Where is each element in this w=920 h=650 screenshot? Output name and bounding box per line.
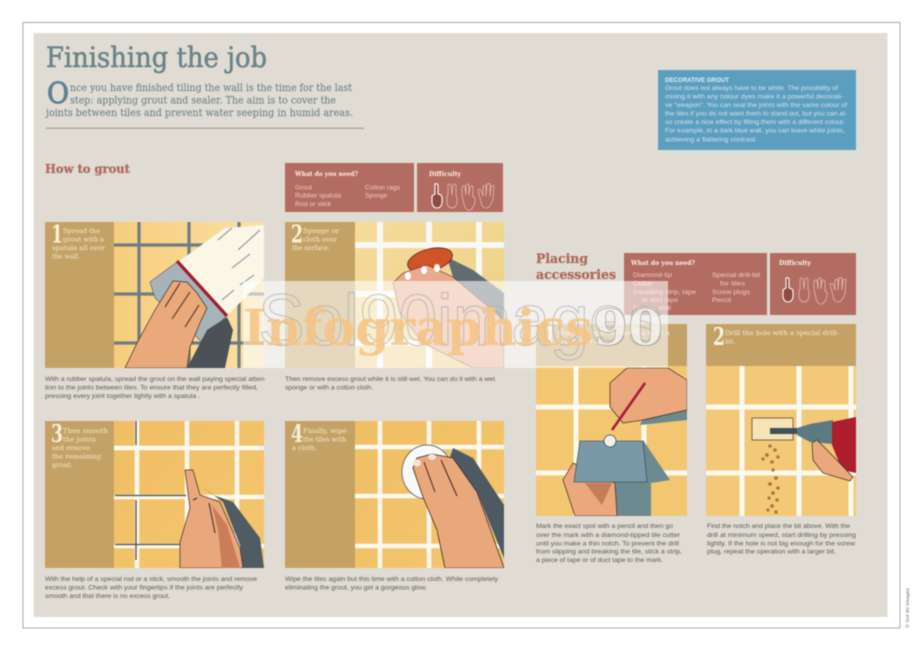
step 3: text column: 3: [51, 419, 63, 448]
panel: difficulty (grout): Difficulty: [429, 171, 462, 178]
step 3: text column: the remaining: [52, 454, 101, 460]
heading: how to grout: How to grout: [45, 162, 130, 176]
step 2: text column: [285, 220, 355, 368]
step 1: text column: grout with a: [63, 236, 104, 244]
decorative grout callout: the tiles if you do not want them to stand out, but you can al-: [665, 111, 847, 118]
icon: three fingers: [814, 278, 827, 304]
step 4: text column: 4: [291, 419, 303, 448]
decorative grout callout: achieving a flattering contrast.: [665, 136, 757, 143]
accessory step 2 caption: plug, repeat the operation with a larger bit.: [707, 549, 836, 556]
panel: what do you need (accessories): What do you need?: [630, 260, 695, 267]
accessory step 1 caption: a piece of tape or of duct tape to the mark.: [536, 557, 663, 564]
accessory step 1 caption: [536, 523, 682, 564]
panel: what do you need (accessories): Screw plugs: [712, 289, 750, 296]
step 3: text column: [45, 419, 114, 568]
heading: placing accessories: accessories: [536, 268, 616, 283]
panel: what do you need (grout): Sponge: [365, 192, 388, 200]
decorative grout callout: [658, 70, 856, 150]
panel: difficulty (accessories): Difficulty: [779, 260, 812, 267]
step 3 caption: [45, 576, 258, 600]
step 1 caption: tion to the joints between tiles. To ensure that they are perfectly filled,: [45, 384, 258, 392]
step 3: text column: grout.: [52, 462, 73, 469]
icon: two fingers: [799, 278, 809, 302]
step 1: text column: 1: [51, 220, 63, 248]
step 1: text column: the wall.: [52, 254, 80, 260]
step 4: text column: a cloth.: [292, 445, 317, 452]
accessory step 1: header: 1: [544, 321, 556, 350]
step 1: text column: Spread the: [63, 228, 100, 235]
step 4: text column: [285, 419, 355, 568]
step 3 caption: excess grout. Check with your fingertips if the joints are perfectly: [45, 585, 244, 592]
accessory step 1: header: Mark the spot on the tile with a: [557, 330, 670, 337]
step 2: text column: 2: [291, 220, 303, 248]
decorative grout callout: so create a nice effect by filling them with a different colour.: [665, 119, 845, 126]
icon: four fingers: [830, 278, 846, 302]
panel: what do you need (accessories): Special drill-bit: [712, 272, 760, 279]
decorative grout callout: For example, in a dark blue wall, you can leave white joints,: [665, 128, 845, 135]
icon: one finger difficulty: [783, 278, 793, 302]
accessory step 1 caption: Mark the exact spot with a pencil and then go: [536, 523, 674, 530]
step 4: text column: Finally, wipe: [303, 428, 348, 435]
accessory step 2 caption: lightly. If the hole is not big enough for the screw: [707, 540, 856, 548]
step 1: text column: spatula all over: [52, 245, 105, 252]
step 1 caption: With a rubber spatula, spread the grout on the wall paying special atten-: [45, 376, 266, 383]
step 4: text column: the tiles with: [303, 436, 346, 444]
watermark: Infographics: [243, 298, 593, 357]
step 2 caption: Then remove excess grout while it is still wet. You can do it with a wet: [285, 376, 495, 383]
step 4 caption: eliminating the grout, you get a gorgeous glow.: [285, 584, 427, 592]
step 3: text column: Then smooth: [63, 428, 108, 435]
step 3: text column: the joints: [63, 436, 96, 444]
step 3: illustration smoothing joints: [113, 420, 265, 569]
watermark: Sol90images: [258, 281, 663, 361]
accessory step 1 caption: from slipping and breaking the tile, stick a strip,: [536, 549, 682, 556]
step 2 caption: [285, 376, 495, 392]
step 3 caption: With the help of a special rod or a stick, smooth the joints and remove: [45, 576, 258, 583]
panel: what do you need (grout): [285, 163, 414, 212]
accessory step 1 caption: over the mark with a diamond-tipped tile cutter: [536, 532, 680, 539]
icon: three fingers: [462, 184, 475, 210]
step 2 caption: sponge or with a cotton cloth.: [285, 384, 373, 392]
step 1: text column: [45, 220, 114, 368]
panel: what do you need (accessories): Pencil: [712, 297, 731, 304]
heading: placing accessories: [536, 252, 616, 283]
step 4: illustration wiping tiles: [354, 420, 505, 569]
step 1 caption: [45, 376, 266, 400]
panel: what do you need (grout): Cotton rags: [365, 184, 400, 192]
decorative grout callout: ve "weapon". You can seal the joints with the same colour of: [665, 102, 847, 109]
step 1: illustration spatula and hand: [113, 221, 264, 369]
step 4 caption: Wipe the tiles again but this time with a cotton cloth. While completely: [285, 576, 499, 583]
panel: what do you need (grout): Rubber spatula: [295, 192, 342, 200]
side credit: © Sol 90 Images: [904, 587, 910, 628]
accessory step 2 caption: [707, 523, 857, 556]
icon: one finger difficulty: [432, 184, 442, 208]
decorative grout callout: Grout does not always have to be white. The possibility of: [665, 85, 838, 92]
intro paragraph: O: [47, 76, 69, 110]
icon: two fingers: [447, 184, 457, 208]
title: Finishing the job: [46, 41, 267, 74]
panel: difficulty (accessories): [770, 253, 856, 315]
panel: what do you need (accessories): Plastic drill: [633, 305, 671, 312]
accessory step 1: illustration marking tile: [536, 366, 688, 517]
panel: what do you need (grout): What do you need?: [294, 171, 358, 178]
accessory step 1: header: cutter.: [557, 338, 597, 345]
panel: what do you need (accessories): or duct tape: [642, 297, 679, 304]
panel: what do you need (accessories): for tiles: [720, 280, 745, 288]
accessory step 1: header: [536, 321, 687, 366]
panel: what do you need (accessories): Diamond-tip: [633, 272, 673, 279]
panel: what do you need (grout): Grout: [295, 184, 312, 192]
step 2: text column: cloth over: [303, 236, 337, 244]
step 2: text column: the surface.: [292, 245, 330, 252]
panel: what do you need (accessories): [624, 253, 767, 315]
intro paragraph: [45, 76, 353, 119]
intro paragraph: step: applying grout and sealer. The aim is to cover the: [70, 96, 336, 106]
step 4 caption: [285, 576, 499, 592]
panel: what do you need (grout): Rod or stick: [295, 201, 332, 208]
icon: four fingers: [478, 184, 494, 208]
accessory step 2: header: bit.: [725, 338, 735, 346]
step 2: text column: Sponge or: [303, 228, 339, 235]
heading: placing accessories: Placing: [536, 252, 588, 267]
accessory step 2: illustration drill: [706, 366, 857, 516]
intro paragraph: joints between tiles and prevent water seeping in humid areas.: [45, 108, 353, 119]
watermark: 90: [593, 298, 663, 357]
decorative grout callout: DECORATIVE GROUT: [665, 77, 729, 84]
panel: what do you need (accessories): Cutter: [633, 280, 653, 288]
decorative grout callout: mixing it with any colour dyes make it a powerful decorati-: [665, 94, 843, 100]
accessory step 1 caption: until you make a thin notch. To prevent the drill: [536, 540, 679, 548]
accessory step 2: header: [706, 322, 856, 366]
intro paragraph: nce you have finished tiling the wall is the time for the last: [70, 83, 352, 94]
accessory step 2: header: 2: [713, 322, 725, 351]
accessory step 2 caption: drill at minimum speed, start drilling by pressing: [707, 532, 857, 539]
accessory step 2: header: Drill the hole with a special drill-: [725, 330, 839, 337]
step 3 caption: smooth and that there is no excess grout.: [45, 593, 170, 600]
step 3: text column: and remove: [52, 445, 90, 452]
step 2: illustration sponge and hand: [354, 222, 504, 368]
step 1 caption: pressing every joint together lightly with a spatula .: [45, 393, 200, 400]
panel: what do you need (accessories): Insulating strip, tape: [633, 289, 697, 296]
accessory step 2 caption: Find the notch and place the bit above. With the: [707, 523, 851, 530]
panel: difficulty (grout): [417, 163, 503, 212]
